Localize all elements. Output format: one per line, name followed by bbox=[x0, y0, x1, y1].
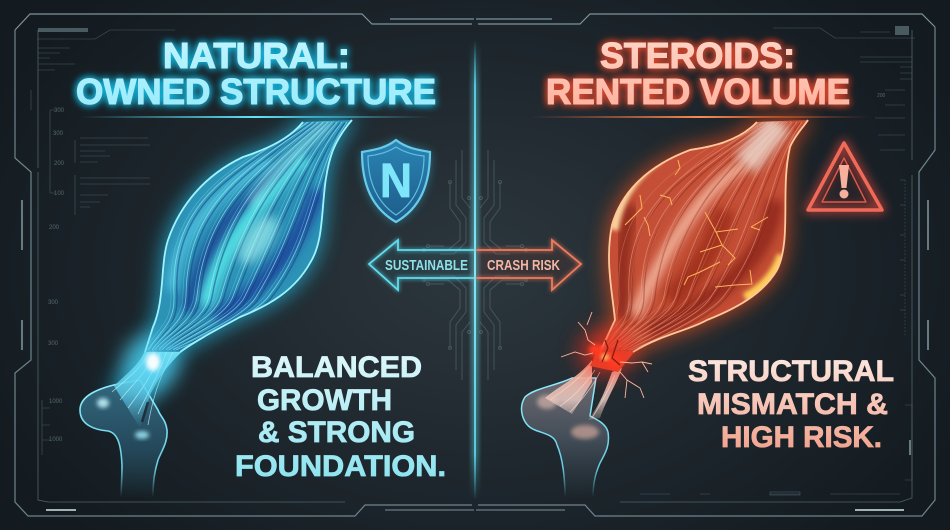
cracks in the steroid muscle bbox=[625, 160, 768, 287]
text: balanced growth: FOUNDATION. bbox=[235, 450, 446, 483]
HUD details right: 200 bbox=[877, 93, 886, 99]
text: balanced growth: GROWTH bbox=[257, 384, 392, 417]
HUD details right bbox=[640, 26, 915, 495]
muscle belly: natural bbox=[146, 120, 351, 352]
muscle belly: steroids bbox=[603, 120, 807, 352]
icon: N shield bbox=[362, 140, 430, 222]
bone: natural bbox=[80, 380, 167, 497]
title: steroids: RENTED VOLUME bbox=[546, 71, 850, 112]
HUD details left: 300 bbox=[48, 300, 59, 306]
HUD details left: 200 bbox=[54, 161, 65, 167]
title: steroids: STEROIDS: bbox=[600, 35, 795, 76]
circuit traces around the centre bbox=[422, 150, 528, 380]
rim: steroids bbox=[600, 120, 808, 352]
HUD details left: 200 bbox=[49, 225, 60, 231]
underline natural bbox=[80, 116, 430, 118]
HUD details left: 1000 bbox=[49, 437, 63, 443]
text: balanced growth bbox=[235, 351, 446, 483]
arrow: sustainable bbox=[369, 240, 474, 290]
HUD details left: 100 bbox=[54, 191, 65, 197]
arrow: crash risk bbox=[476, 240, 581, 290]
text: structural mismatch: HIGH RISK. bbox=[721, 421, 882, 454]
tendon: steroids bbox=[545, 345, 640, 420]
icon: warning triangle bbox=[808, 143, 882, 210]
text: structural mismatch: STRUCTURAL bbox=[688, 355, 894, 388]
bone: steroids bbox=[522, 378, 609, 497]
title: natural bbox=[76, 35, 436, 112]
underline steroids bbox=[530, 116, 870, 118]
glow spots: natural bbox=[97, 336, 178, 439]
tendon: natural bbox=[112, 348, 184, 428]
text: balanced growth: BALANCED bbox=[251, 351, 422, 384]
HUD details left: 300 bbox=[54, 108, 65, 114]
HUD details left: 1000 bbox=[49, 399, 63, 405]
arrow: sustainable: SUSTAINABLE bbox=[385, 258, 468, 274]
glow spots: bone bbox=[537, 395, 599, 439]
icon: N shield: N bbox=[380, 155, 412, 208]
title: natural: NATURAL: bbox=[163, 35, 350, 76]
rim: natural bbox=[145, 120, 352, 352]
title: natural: OWNED STRUCTURE bbox=[76, 71, 436, 112]
text: structural mismatch bbox=[688, 355, 894, 454]
natural muscle and bone bbox=[80, 110, 370, 497]
text: structural mismatch: MISMATCH & bbox=[697, 388, 888, 421]
HUD details left: 300 bbox=[48, 341, 59, 347]
arrow: crash risk: CRASH RISK bbox=[487, 258, 560, 274]
steroid muscle and bone bbox=[522, 110, 830, 497]
rupture and sparks bbox=[561, 312, 652, 398]
HUD details left bbox=[31, 28, 175, 455]
text: balanced growth: & STRONG bbox=[258, 416, 415, 449]
centre divider line bbox=[471, 40, 479, 500]
HUD details left: 300 bbox=[53, 131, 64, 137]
title: steroids bbox=[546, 35, 850, 112]
